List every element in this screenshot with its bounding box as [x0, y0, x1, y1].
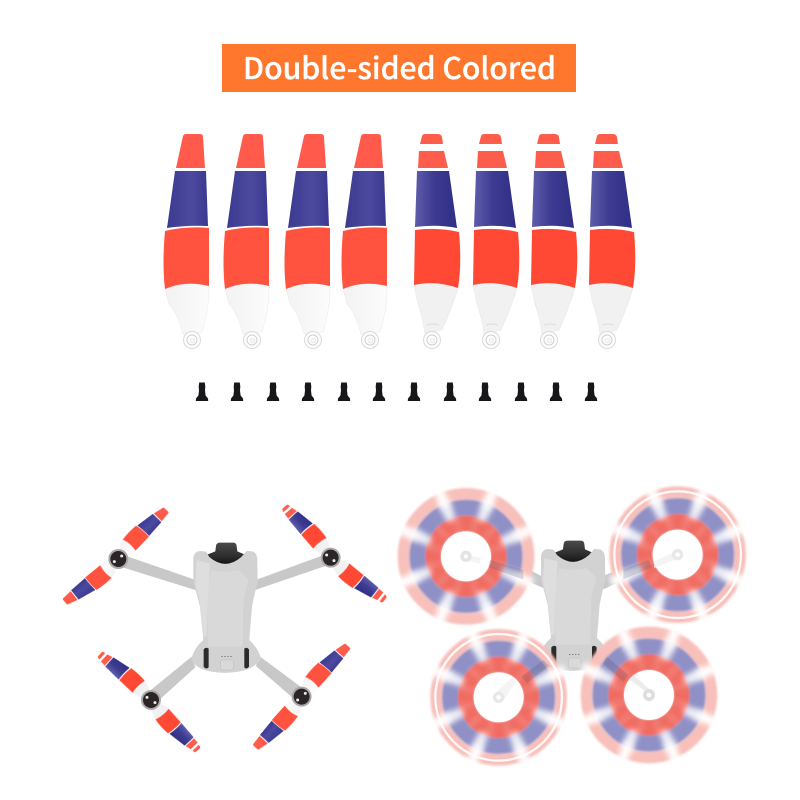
- spinning disc: rear right: [586, 632, 712, 758]
- title banner: Double-sided Colored: [243, 44, 556, 88]
- arms seen through spinning discs: [489, 560, 652, 683]
- motors: [108, 548, 341, 710]
- propeller blades: rear right: [251, 638, 352, 755]
- propeller blades: front right: [280, 499, 389, 608]
- propeller blades: rear left: [95, 646, 203, 758]
- arms: [517, 563, 623, 589]
- drone body: [191, 543, 261, 673]
- mounting screws: [196, 382, 597, 401]
- drone with stationary propellers: [61, 499, 389, 758]
- spinning disc: front left: [403, 494, 529, 619]
- arms: [118, 553, 328, 702]
- propeller blades: front left: [61, 502, 171, 611]
- spinning disc: front right: [614, 491, 741, 618]
- drone with spinning propellers: [403, 491, 741, 761]
- propellers with double tip stripe: [414, 134, 635, 348]
- drone body: [539, 541, 609, 671]
- propellers with single tip stripe: [164, 134, 387, 348]
- spinning disc: rear left: [435, 634, 562, 761]
